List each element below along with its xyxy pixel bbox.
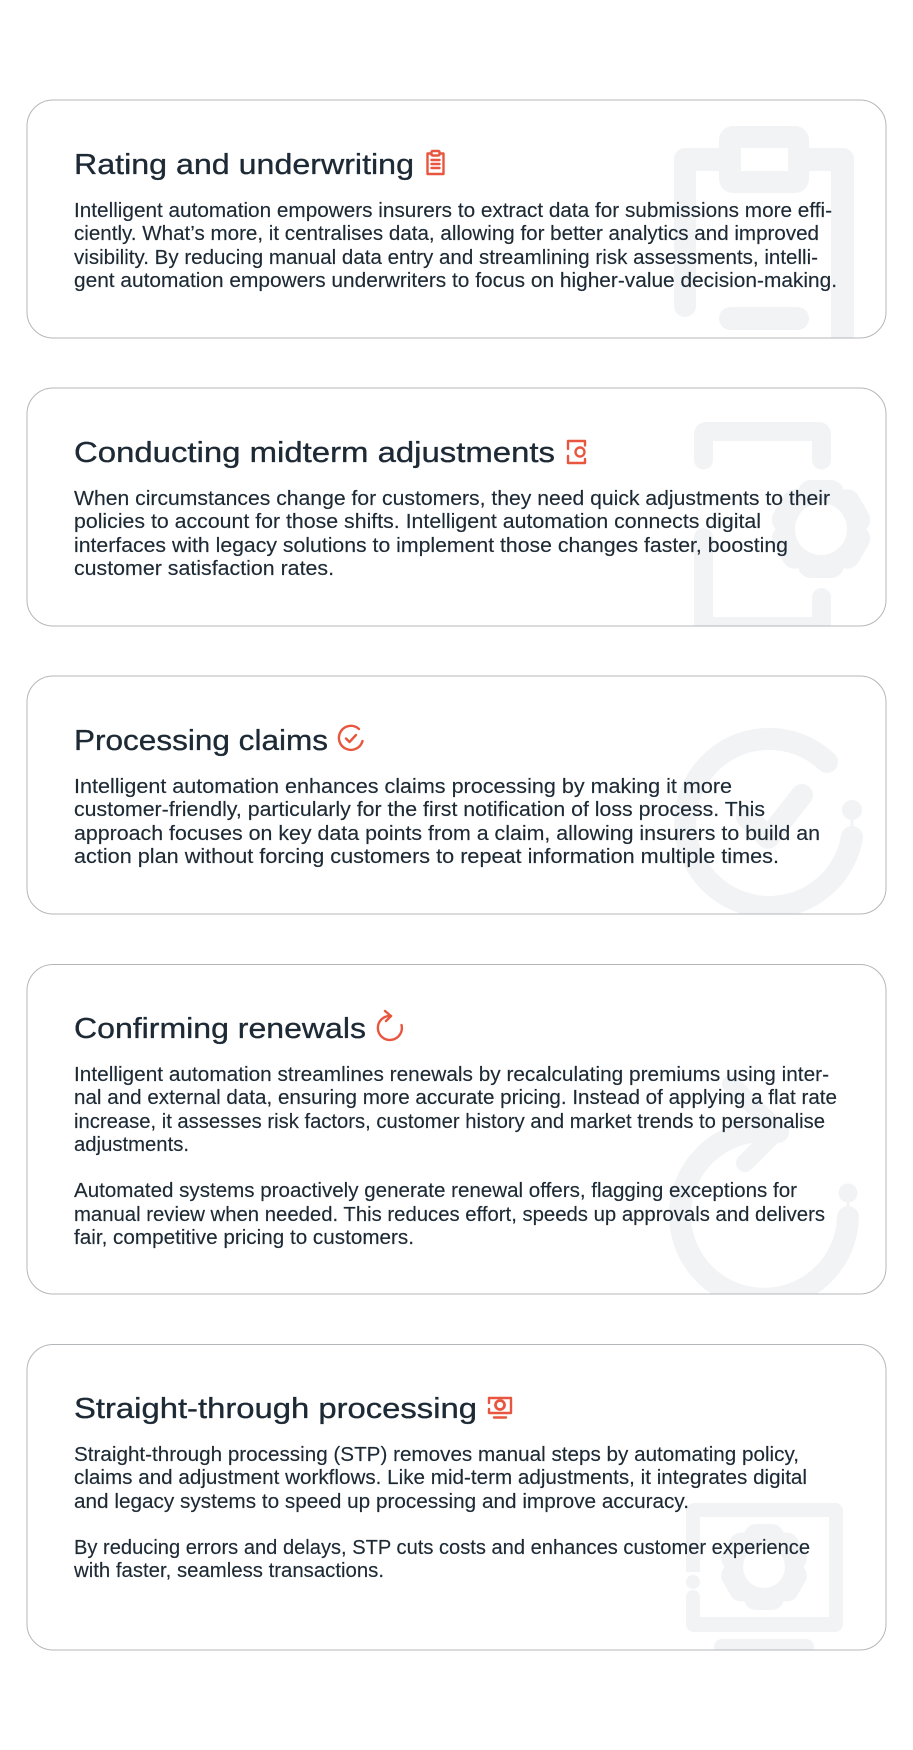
body text: paragraph 1 (74, 1063, 837, 1156)
body text: ciently. What’s more, it centralises data, allowing for better analytics and improved (74, 222, 819, 245)
body text (74, 199, 837, 292)
body text: paragraph 1 (74, 1443, 807, 1513)
icon: check circle (339, 726, 362, 750)
body text: paragraph 2 (73, 1536, 810, 1582)
panel: confirming renewals (27, 964, 886, 1299)
panel: processing claims (27, 676, 886, 914)
body text: paragraph 1: nal and external data, ensuring more accurate pricing. Instead of applying a flat rate (74, 1086, 837, 1109)
body text: customer-friendly, particularly for the first notification of loss process. This (74, 798, 765, 821)
body text: paragraph 1: increase, it assesses risk factors, customer history and market trends to personalise (74, 1110, 825, 1133)
body text: paragraph 2: By reducing errors and delays, STP cuts costs and enhances customer experience (74, 1536, 810, 1559)
watermark icon: check circle (685, 739, 862, 907)
body text: paragraph 2: fair, competitive pricing to customers. (74, 1226, 414, 1249)
body text: paragraph 2 (74, 1179, 825, 1249)
watermark icon: clipboard (674, 126, 854, 340)
body text: When circumstances change for customers, they need quick adjustments to their (74, 487, 830, 510)
heading: Processing claims (74, 725, 328, 757)
heading: Rating and underwriting (74, 149, 414, 181)
body text: paragraph 1: Straight-through processing (STP) removes manual steps by automating policy, (74, 1443, 799, 1466)
body text: policies to account for those shifts. Intelligent automation connects digital (74, 510, 761, 533)
body text: Intelligent automation enhances claims processing by making it more (74, 775, 732, 798)
body text: interfaces with legacy solutions to implement those changes faster, boosting (74, 534, 788, 557)
body text: paragraph 1: Intelligent automation streamlines renewals by recalculating premiums using inter- (74, 1063, 829, 1086)
panel: rating and underwriting (27, 100, 886, 340)
heading: Straight-through processing (74, 1393, 477, 1425)
body text: visibility. By reducing manual data entry and streamlining risk assessments, intelli- (74, 246, 818, 269)
body text: paragraph 2: manual review when needed. This reduces effort, speeds up approvals and delivers (74, 1203, 825, 1226)
watermark icon: renewal arrow (680, 1084, 858, 1299)
body text: paragraph 2: with faster, seamless transactions. (73, 1559, 384, 1582)
panel: straight-through processing (27, 1344, 886, 1661)
body text (74, 775, 820, 868)
body text: paragraph 2: Automated systems proactively generate renewal offers, flagging exceptions for (74, 1179, 797, 1202)
body text (74, 487, 830, 580)
icon: monitor with gear (489, 1398, 511, 1418)
body text: paragraph 1: claims and adjustment workflows. Like mid-term adjustments, it integrates digital (74, 1466, 807, 1489)
icon: document with gear (568, 441, 585, 463)
icon: renewal arrow (378, 1011, 402, 1040)
icon: clipboard (428, 151, 444, 174)
body text: paragraph 1: and legacy systems to speed up processing and improve accuracy. (74, 1490, 689, 1513)
watermark icon: document with gear (694, 422, 875, 640)
panel: conducting midterm adjustments (27, 388, 886, 640)
heading: Conducting midterm adjustments (74, 437, 555, 469)
body text: paragraph 1: adjustments. (74, 1133, 189, 1156)
heading: Confirming renewals (74, 1013, 366, 1045)
body text: Intelligent automation empowers insurers to extract data for submissions more effi- (74, 199, 832, 222)
body text: approach focuses on key data points from a claim, allowing insurers to build an (74, 822, 820, 845)
body text: gent automation empowers underwriters to focus on higher-value decision-making. (74, 269, 837, 292)
watermark icon: monitor with gear (686, 1503, 843, 1661)
body text: action plan without forcing customers to repeat information multiple times. (74, 845, 779, 868)
body text: customer satisfaction rates. (74, 557, 334, 580)
